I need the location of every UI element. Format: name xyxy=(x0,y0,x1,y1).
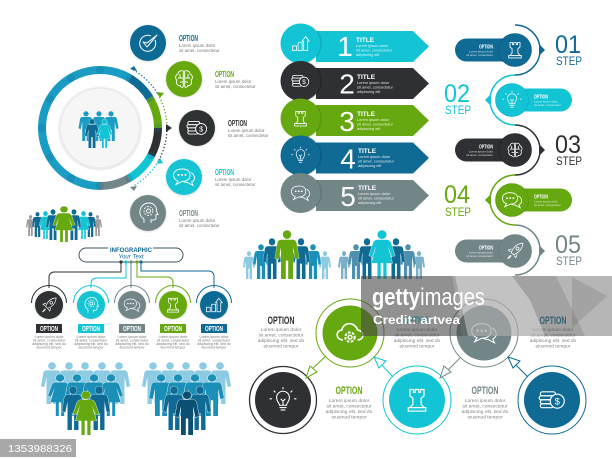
step 05: sit amet, consectetur xyxy=(466,254,493,258)
node: rook: Lorem ipsum dolor xyxy=(159,335,188,339)
node: rook: eiusmod tempor xyxy=(160,346,186,350)
step 05: OPTION xyxy=(479,246,493,252)
people group: row with teal woman xyxy=(338,230,425,279)
text: black option: adipiscing elit. sed do xyxy=(258,338,305,344)
outer ring xyxy=(38,66,162,190)
step 05: STEP xyxy=(556,254,582,268)
step 01: sit amet, consectetur xyxy=(466,53,493,57)
connectors xyxy=(49,260,214,288)
row 4: sit amet, consectetur xyxy=(358,158,395,164)
node: chart: eiusmod tempor xyxy=(201,346,227,350)
node: chat: eiusmod tempor xyxy=(119,346,145,350)
watermark banner: gettyimages xyxy=(372,284,485,311)
node: chat: Lorem ipsum dolor xyxy=(118,335,147,339)
step 01: OPTION xyxy=(479,44,493,50)
arrow: green xyxy=(306,356,326,378)
node: touch: eiusmod tempor xyxy=(78,346,104,350)
dotted arrows xyxy=(134,70,167,186)
step 03: Lorem ipsum dolor xyxy=(469,150,493,154)
row 2 xyxy=(280,61,429,101)
node: rook xyxy=(156,286,190,350)
row 5: sit amet, consectetur xyxy=(358,196,395,200)
text: gray option: OPTION xyxy=(472,385,499,397)
text: teal option: eiusmod tempor xyxy=(399,344,435,350)
row 5 xyxy=(280,173,429,213)
option: coins: sit amet, consectetur xyxy=(228,133,269,138)
step 04: Lorem ipsum dolor xyxy=(534,200,558,204)
node: chat: adipiscing elit. sed do xyxy=(115,342,149,346)
step 01 xyxy=(455,25,582,75)
text: blue option xyxy=(530,315,577,350)
row 1: adipiscing elit xyxy=(356,52,380,57)
step 04: STEP xyxy=(445,205,471,219)
center disc xyxy=(60,88,140,168)
option: coins: OPTION xyxy=(228,119,247,128)
node: touch xyxy=(74,286,108,350)
row 4: TITLE xyxy=(358,148,377,155)
row 2: sit amet, consectetur xyxy=(357,84,394,90)
node: lightbulb xyxy=(250,366,316,434)
row 4: adipiscing elit xyxy=(358,163,382,168)
row 1 xyxy=(280,24,429,64)
text: green option: sit amet, consectetur xyxy=(326,404,372,410)
node: chat xyxy=(114,286,150,350)
node: rocket: sit amet, consectetur xyxy=(33,338,66,342)
node: cloud gear xyxy=(316,299,384,367)
node: chart: sit amet, consectetur xyxy=(198,338,231,342)
panel: steps xyxy=(444,25,582,275)
option: brain: OPTION xyxy=(215,70,234,79)
text: black option: Lorem ipsum dolor xyxy=(261,327,302,333)
step 01: STEP xyxy=(556,54,582,68)
step 01: 01 xyxy=(555,31,581,59)
row 5: TITLE xyxy=(358,185,377,192)
option: head: sit amet, consectetur xyxy=(179,223,220,228)
row 2: Lorem ipsum dolor xyxy=(357,80,390,85)
node: chat xyxy=(450,299,518,367)
option: head xyxy=(130,195,220,231)
text: blue option: eiusmod tempor xyxy=(535,344,571,350)
text: green option: OPTION xyxy=(336,385,363,397)
node: coins xyxy=(518,366,586,434)
option: check: Lorem ipsum dolor xyxy=(179,43,216,48)
icon: team in center xyxy=(78,111,118,148)
row 1: Lorem ipsum dolor xyxy=(356,43,389,48)
step 05: Lorem ipsum dolor xyxy=(469,250,493,254)
text: teal option: Lorem ipsum dolor xyxy=(397,327,438,333)
option: chat: sit amet, consectetur xyxy=(215,182,256,187)
node: rocket: OPTION xyxy=(40,326,58,333)
text: blue option: adipiscing elit. sed do xyxy=(530,338,577,344)
option: chat: OPTION xyxy=(215,168,234,177)
step 02: STEP xyxy=(445,103,471,117)
panel: process cycle xyxy=(250,299,586,434)
option: brain xyxy=(166,61,256,97)
node: rocket xyxy=(32,286,66,350)
text: green option: eiusmod tempor xyxy=(331,414,367,420)
text: teal option: adipiscing elit. sed do xyxy=(394,338,441,344)
text: teal option: sit amet, consectetur xyxy=(394,332,440,338)
step 05: 05 xyxy=(555,231,581,259)
people group: row with green man xyxy=(243,230,331,279)
arrow: blue xyxy=(508,357,528,377)
node: chart: Lorem ipsum dolor xyxy=(200,335,229,339)
text: black option: sit amet, consectetur xyxy=(258,332,304,338)
panel: circular diagram xyxy=(38,25,269,231)
row 3: 3 xyxy=(339,106,355,137)
row 3: Lorem ipsum dolor xyxy=(357,117,390,122)
panel: numbered arrows xyxy=(280,24,429,213)
option: chat: Lorem ipsum dolor xyxy=(215,177,252,182)
option: brain: sit amet, consectetur xyxy=(215,84,256,89)
row 3 xyxy=(280,98,429,138)
option: brain: Lorem ipsum dolor xyxy=(215,79,252,84)
step 02: OPTION xyxy=(534,94,548,100)
text: gray option: Lorem ipsum dolor xyxy=(465,398,506,404)
text: blue option: sit amet, consectetur xyxy=(530,332,576,338)
step 04 xyxy=(444,175,572,225)
option: check xyxy=(130,25,220,61)
text: black option: OPTION xyxy=(268,315,295,327)
text: gray option: sit amet, consectetur xyxy=(462,404,508,410)
image id tag xyxy=(0,439,76,457)
text: teal option: OPTION xyxy=(404,315,431,327)
row 5: 5 xyxy=(340,181,356,212)
row 3: sit amet, consectetur xyxy=(357,122,394,126)
node: rook: OPTION xyxy=(164,326,182,333)
node: rook: adipiscing elit. sed do xyxy=(156,342,190,346)
step 04: sit amet, consectetur xyxy=(534,203,561,207)
node: touch: OPTION xyxy=(82,326,100,333)
node: touch: sit amet, consectetur xyxy=(75,338,108,342)
chart title: Your Text xyxy=(118,254,144,260)
text: gray option xyxy=(462,385,509,420)
step 02 xyxy=(444,75,572,125)
row 2: adipiscing elit xyxy=(357,89,381,94)
watermark banner xyxy=(361,276,612,336)
node: chart: adipiscing elit. sed do xyxy=(197,342,231,346)
row 2: TITLE xyxy=(357,74,376,81)
option: check: OPTION xyxy=(179,34,198,43)
option: head: Lorem ipsum dolor xyxy=(179,218,216,223)
option: coins xyxy=(179,110,269,146)
option: check: sit amet, consectetur xyxy=(179,48,220,53)
node: chat: sit amet, consectetur xyxy=(116,338,149,342)
step 05 xyxy=(455,225,582,275)
row 2: 2 xyxy=(339,68,355,100)
people group: small row xyxy=(26,206,102,242)
text: teal option xyxy=(394,315,441,350)
chart title: INFOGRAPHIC xyxy=(110,248,153,254)
node: rook xyxy=(383,366,451,434)
step 03: 03 xyxy=(555,131,581,159)
chart title xyxy=(79,248,183,262)
row 1: 1 xyxy=(337,31,353,62)
step 02: 02 xyxy=(444,80,470,108)
text: green option: Lorem ipsum dolor xyxy=(329,398,370,404)
row 4 xyxy=(280,136,429,176)
panel: hierarchy chart xyxy=(32,248,232,350)
node: chart: OPTION xyxy=(205,326,223,333)
node: chat: OPTION xyxy=(123,326,141,333)
row 1: sit amet, consectetur xyxy=(356,48,393,52)
step 04: OPTION xyxy=(534,194,548,200)
option: coins: Lorem ipsum dolor xyxy=(228,128,265,133)
arrowheads xyxy=(130,66,172,191)
node: touch: adipiscing elit. sed do xyxy=(74,342,108,346)
text: black option: eiusmod tempor xyxy=(263,344,299,350)
node: rocket: eiusmod tempor xyxy=(36,346,62,350)
row 5: Lorem ipsum dolor xyxy=(358,191,391,196)
arrow: gray xyxy=(440,358,460,378)
row 5: adipiscing elit xyxy=(358,200,382,205)
text: gray option: adipiscing elit. sed do xyxy=(462,409,509,415)
text: gray option: eiusmod tempor xyxy=(467,414,503,420)
step 04: 04 xyxy=(444,181,470,209)
step 03: sit amet, consectetur xyxy=(466,153,493,157)
image id tag: 1353988326 xyxy=(8,443,72,455)
option: chat xyxy=(166,159,256,195)
text: blue option: OPTION xyxy=(540,315,567,327)
people group: pyramid with green woman xyxy=(41,362,130,435)
row 3: adipiscing elit xyxy=(357,126,381,131)
node: rocket: Lorem ipsum dolor xyxy=(35,335,64,339)
step 03 xyxy=(455,125,582,175)
step 03: OPTION xyxy=(479,144,493,150)
node: rocket: adipiscing elit. sed do xyxy=(32,342,66,346)
watermark banner: Credit: artvea xyxy=(373,315,461,327)
row 4: Lorem ipsum dolor xyxy=(358,154,391,159)
text: blue option: Lorem ipsum dolor xyxy=(533,327,574,333)
text: green option: adipiscing elit. sed do xyxy=(326,409,373,415)
step 03: STEP xyxy=(556,154,582,168)
text: black option xyxy=(258,315,305,350)
people group: pyramid with blue man xyxy=(142,362,231,435)
step 01: Lorem ipsum dolor xyxy=(469,50,493,54)
node: touch: Lorem ipsum dolor xyxy=(77,335,106,339)
text: green option xyxy=(326,385,373,420)
arrow: teal xyxy=(374,357,393,377)
row 1: TITLE xyxy=(356,37,375,44)
row 3: TITLE xyxy=(357,111,376,118)
option: head: OPTION xyxy=(179,209,198,218)
node: chart xyxy=(196,286,232,350)
step 02: sit amet, consectetur xyxy=(534,103,561,107)
row 4: 4 xyxy=(340,144,356,174)
node: rook: sit amet, consectetur xyxy=(157,338,190,342)
step 02: Lorem ipsum dolor xyxy=(534,100,558,104)
